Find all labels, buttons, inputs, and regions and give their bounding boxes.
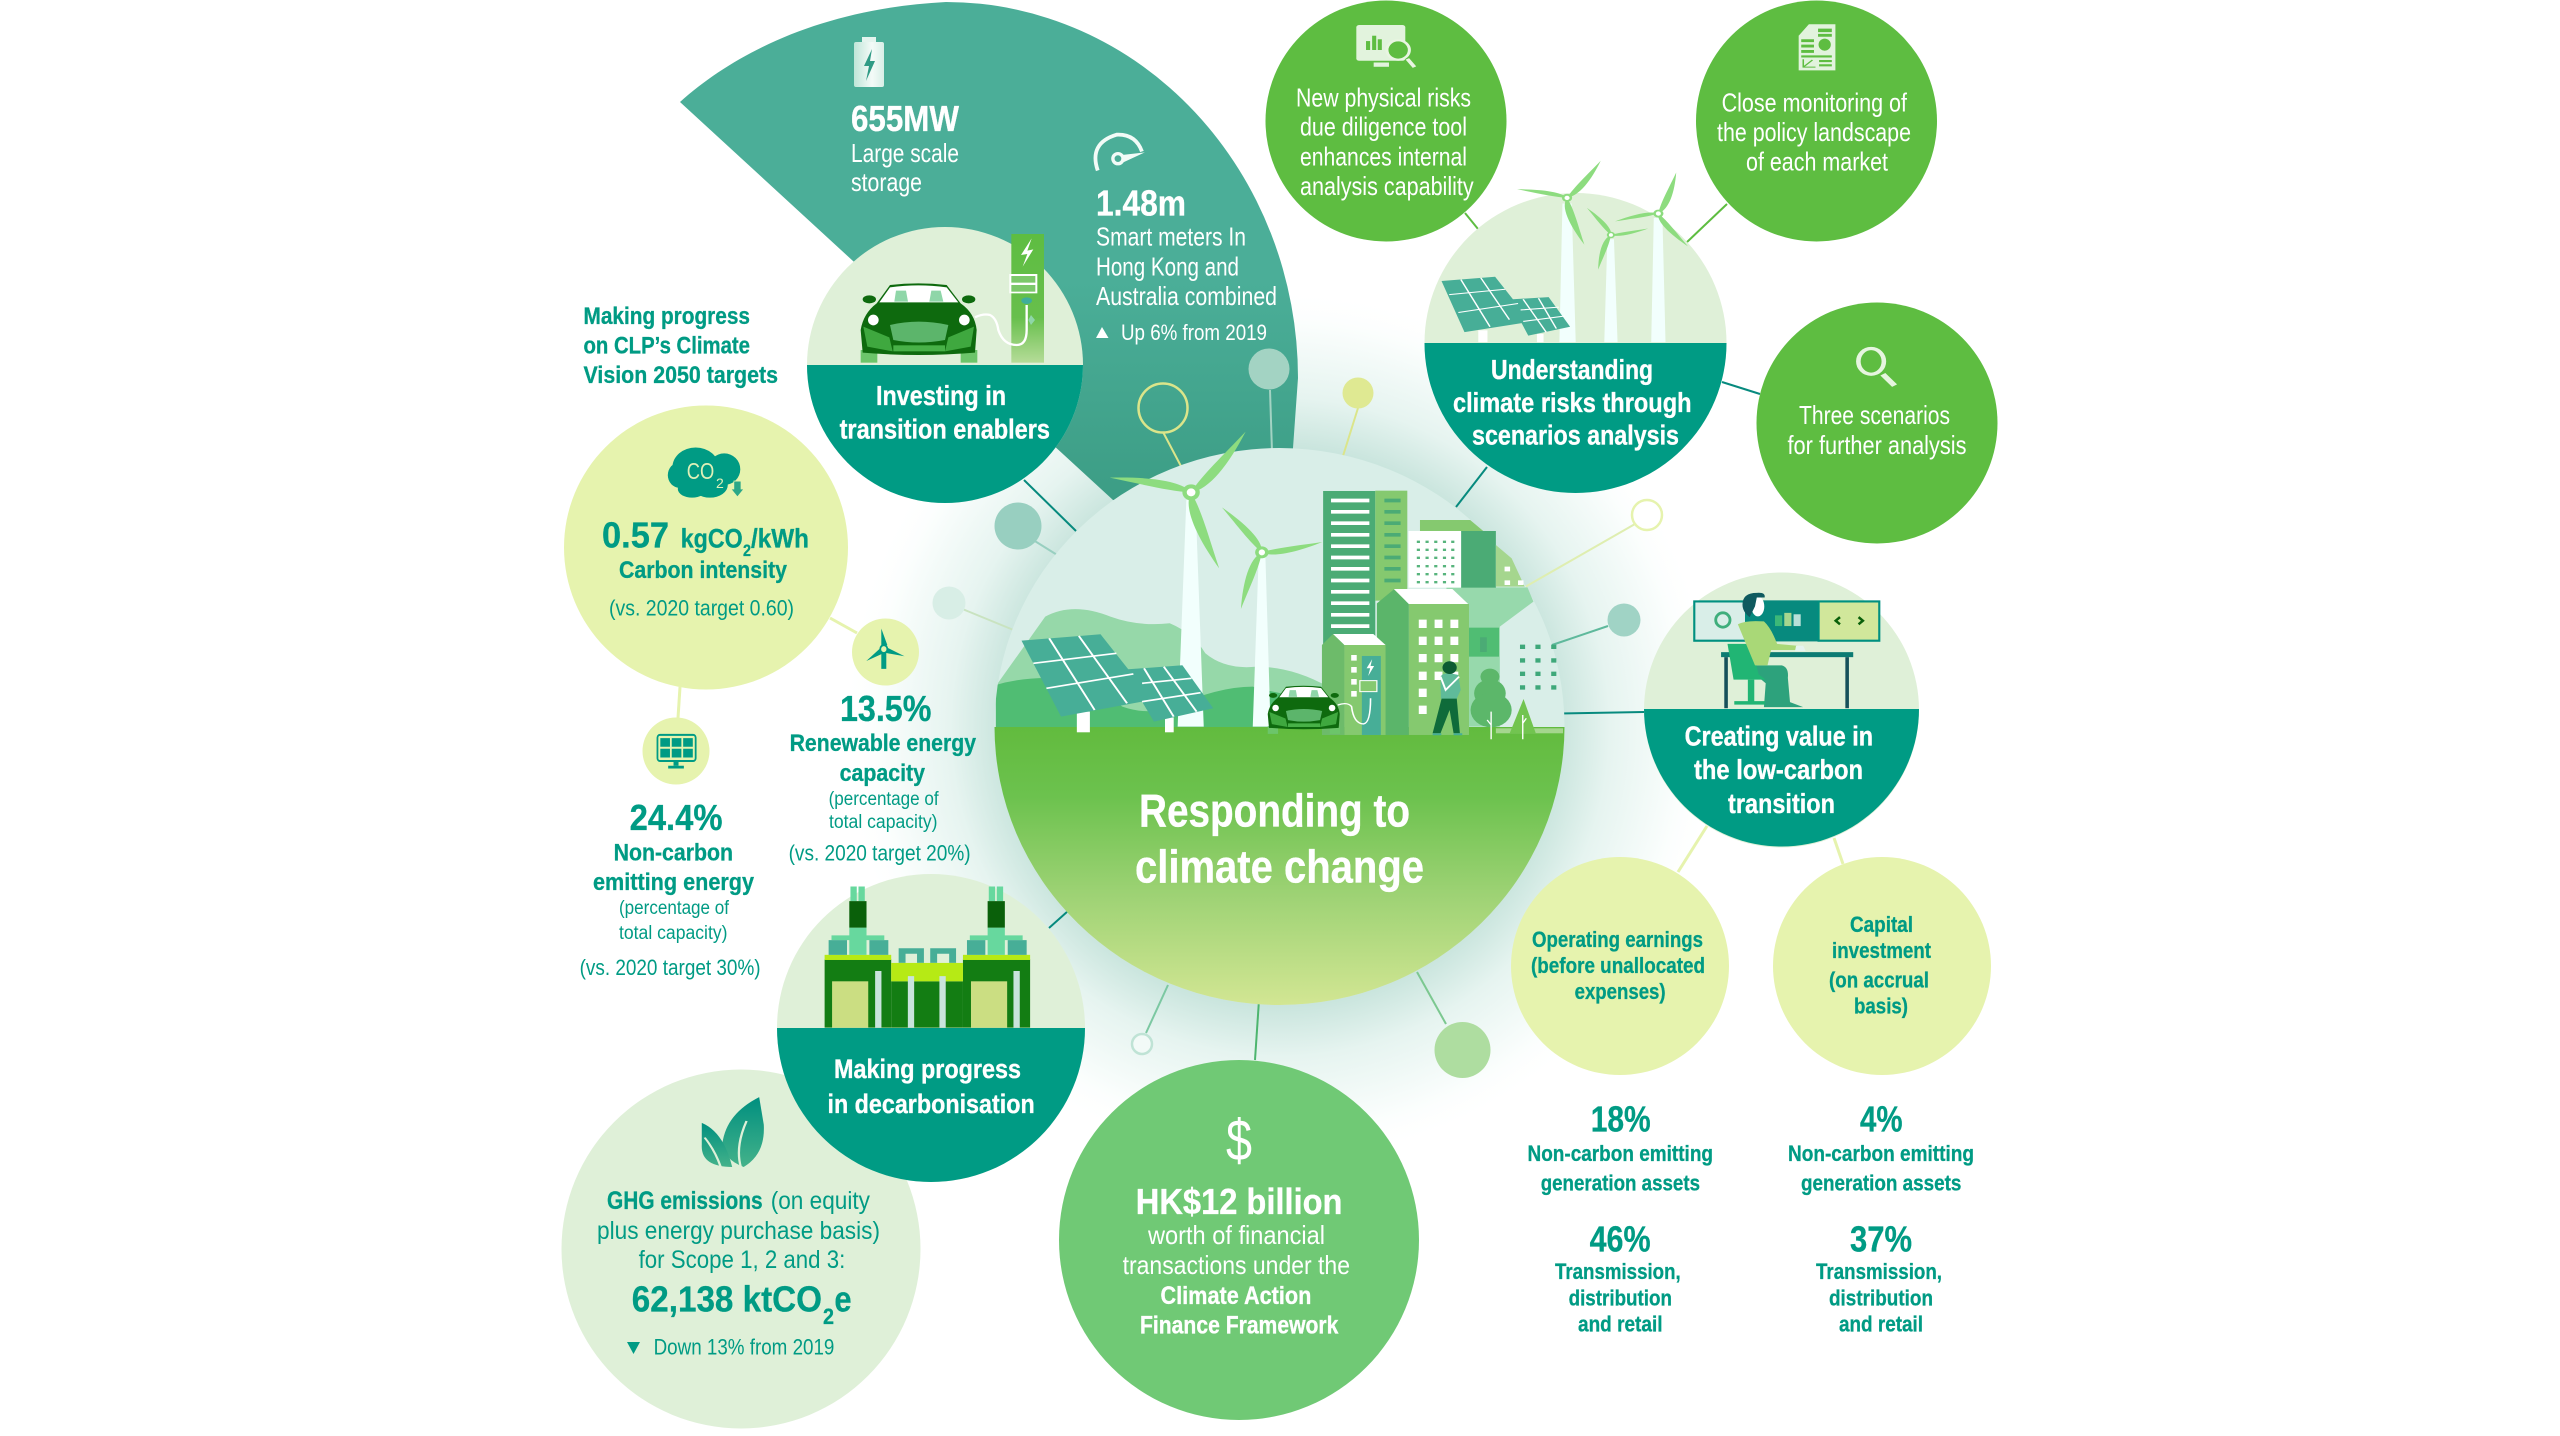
stats: operating earnings breakdown: generation assets bbox=[1541, 1171, 1700, 1196]
text: Close monitoring of bbox=[1722, 87, 1908, 117]
text: Climate Action bbox=[1160, 1282, 1311, 1310]
stats: capital investment breakdown: Transmission, bbox=[1816, 1259, 1942, 1284]
heading: Climate Vision 2050: Making progress bbox=[584, 303, 750, 330]
stat: 0.57 kgCO2/kWh bbox=[602, 514, 809, 620]
stat: 1.48m smart meters: 1.48m bbox=[1096, 183, 1186, 224]
stat: 0.57 kgCO2/kWh: 2 bbox=[743, 541, 751, 560]
text: (on accrual bbox=[1829, 968, 1929, 992]
stat: 0.57 kgCO2/kWh: kgCO bbox=[681, 524, 743, 554]
stats: capital investment breakdown: and retail bbox=[1839, 1312, 1923, 1337]
icon: CO2 cloud: 2 bbox=[716, 475, 724, 491]
stats: operating earnings breakdown: 18% bbox=[1591, 1099, 1651, 1140]
stat: 13.5% renewable energy capacity: total capacity) bbox=[829, 812, 938, 833]
stat: 655MW large scale storage bbox=[851, 98, 959, 197]
text: basis) bbox=[1854, 994, 1908, 1019]
text: Operating earnings bbox=[1532, 927, 1703, 952]
text: plus energy purchase basis) bbox=[597, 1217, 880, 1245]
stats: operating earnings breakdown: 46% bbox=[1590, 1219, 1651, 1260]
label: the low-carbon bbox=[1694, 754, 1863, 785]
label: transition enablers bbox=[840, 414, 1050, 445]
panel: central circle with city scene bbox=[990, 431, 1570, 1012]
stat: 24.4% non-carbon emitting energy: Non-carbon bbox=[614, 840, 733, 867]
panel: operating earnings bbox=[1511, 857, 1729, 1075]
stat: 655MW large scale storage: Large scale bbox=[851, 138, 959, 168]
text: the policy landscape bbox=[1717, 117, 1911, 147]
stat: 1.48m smart meters: Up 6% from 2019 bbox=[1121, 320, 1267, 345]
text bbox=[1296, 82, 1474, 201]
label: Creating value in bbox=[1685, 721, 1873, 752]
stat: 1.48m smart meters bbox=[1096, 183, 1277, 345]
connector lines between circles bbox=[678, 204, 1843, 1060]
text: enhances internal bbox=[1300, 141, 1467, 171]
icon: charging station bbox=[975, 234, 1044, 363]
label bbox=[828, 1054, 1035, 1119]
scene: solar panels bbox=[1022, 634, 1213, 732]
stat: 0.57 kgCO2/kWh: 0.57 bbox=[602, 514, 669, 556]
scene: hills clipped to circle bbox=[990, 609, 1570, 1012]
panel: GHG emissions bbox=[562, 1070, 920, 1428]
text: HK$12 billion bbox=[1136, 1181, 1342, 1222]
text: (on equity bbox=[771, 1187, 870, 1215]
label: Making progress bbox=[834, 1054, 1021, 1084]
scene: wind turbines bbox=[1109, 431, 1323, 727]
stat: 13.5% renewable energy capacity: 13.5% bbox=[840, 688, 931, 729]
text bbox=[1123, 1181, 1350, 1340]
label bbox=[1453, 354, 1692, 451]
stat: 62,138 ktCO2e: e bbox=[834, 1278, 852, 1320]
label bbox=[1685, 721, 1873, 819]
icon: CO2 cloud: CO bbox=[687, 458, 714, 484]
icon: solar panel badge bbox=[642, 718, 710, 784]
panel: understanding climate risks bbox=[1424, 160, 1726, 493]
icon: report document bbox=[1799, 24, 1835, 70]
panel: capital investment bbox=[1773, 857, 1991, 1075]
background halo around the central circle bbox=[840, 287, 1720, 1167]
stats: operating earnings breakdown: distribution bbox=[1569, 1286, 1672, 1311]
scene: city buildings bbox=[1322, 491, 1563, 735]
text: expenses) bbox=[1575, 979, 1666, 1004]
stats: capital investment breakdown: Non-carbon emitting bbox=[1788, 1141, 1974, 1166]
stat: 1.48m smart meters: Australia combined bbox=[1096, 281, 1277, 311]
text: GHG emissions bbox=[607, 1187, 763, 1215]
text: Capital bbox=[1850, 912, 1913, 937]
stat: 0.57 kgCO2/kWh: (vs. 2020 target 0.60) bbox=[609, 596, 794, 620]
panel: making progress in decarbonisation bbox=[777, 874, 1085, 1182]
stat: 1.48m smart meters: Smart meters In bbox=[1096, 222, 1246, 252]
icon: wind turbine badge bbox=[852, 618, 919, 686]
text: New physical risks bbox=[1296, 82, 1471, 112]
text bbox=[1717, 87, 1911, 177]
text: (before unallocated bbox=[1531, 953, 1705, 978]
text: Finance Framework bbox=[1140, 1312, 1338, 1340]
text: for Scope 1, 2 and 3: bbox=[639, 1246, 845, 1274]
heading: Climate Vision 2050: on CLP’s Climate bbox=[584, 333, 750, 360]
stat: 0.57 kgCO2/kWh: /kWh bbox=[751, 524, 809, 554]
stats: operating earnings breakdown bbox=[1528, 1099, 1713, 1337]
stats: operating earnings breakdown: Non-carbon emitting bbox=[1528, 1141, 1713, 1166]
panel: HK$12 billion climate finance bbox=[1059, 1060, 1419, 1420]
stat: 13.5% renewable energy capacity: (percentage of bbox=[829, 789, 939, 810]
text: analysis capability bbox=[1300, 171, 1474, 201]
stat: 655MW large scale storage: 655MW bbox=[851, 98, 959, 139]
icon: CO2 cloud bbox=[668, 447, 744, 498]
label bbox=[840, 380, 1050, 445]
panel: new physical risks tool bbox=[1266, 0, 1506, 242]
stat: 13.5% renewable energy capacity: (vs. 2020 target 20%) bbox=[789, 841, 971, 866]
icon: chart with magnifier bbox=[1356, 25, 1414, 67]
stat: 24.4% non-carbon emitting energy bbox=[580, 797, 761, 980]
text: for further analysis bbox=[1788, 430, 1966, 460]
stat: 0.57 kgCO2/kWh: Carbon intensity bbox=[619, 557, 788, 584]
label: scenarios analysis bbox=[1472, 420, 1679, 451]
stat: 655MW large scale storage: storage bbox=[851, 167, 922, 197]
icon: magnifying glass bbox=[1858, 349, 1895, 386]
main title: climate change bbox=[1135, 841, 1424, 893]
label: transition bbox=[1728, 788, 1835, 819]
panel: investing in transition enablers bbox=[807, 227, 1083, 503]
stats: capital investment breakdown: generation assets bbox=[1801, 1171, 1961, 1196]
stat: 62,138 ktCO2e bbox=[627, 1278, 852, 1360]
decorative bubbles bbox=[932, 348, 1662, 1078]
icon: electric car bbox=[861, 283, 977, 363]
stat: 13.5% renewable energy capacity: Renewable energy bbox=[790, 730, 977, 757]
stat: 13.5% renewable energy capacity bbox=[789, 688, 977, 866]
stat: 24.4% non-carbon emitting energy: 24.4% bbox=[630, 797, 722, 838]
stat: 62,138 ktCO2e: 62,138 ktCO bbox=[632, 1278, 822, 1320]
stat: 24.4% non-carbon emitting energy: (percentage of bbox=[619, 898, 730, 919]
heading: Climate Vision 2050: Vision 2050 targets bbox=[584, 362, 778, 389]
label: climate risks through bbox=[1453, 387, 1692, 418]
stat: 62,138 ktCO2e: 2 bbox=[823, 1304, 834, 1329]
stats: capital investment breakdown bbox=[1788, 1099, 1974, 1337]
icon: leaves bbox=[702, 1097, 764, 1167]
stat: 13.5% renewable energy capacity: capacity bbox=[840, 760, 926, 787]
stat: 24.4% non-carbon emitting energy: emitting energy bbox=[593, 869, 755, 896]
illustration: turbines and solar panels bbox=[1442, 160, 1689, 342]
panel: transition enablers teal sector bbox=[680, 2, 1298, 510]
stat: 24.4% non-carbon emitting energy: total capacity) bbox=[619, 923, 728, 944]
label: in decarbonisation bbox=[828, 1089, 1035, 1119]
stats: capital investment breakdown: 37% bbox=[1850, 1219, 1912, 1260]
stats: capital investment breakdown: 4% bbox=[1860, 1099, 1902, 1140]
text: due diligence tool bbox=[1300, 112, 1467, 142]
text: transactions under the bbox=[1123, 1250, 1350, 1280]
main title bbox=[1135, 785, 1424, 893]
text: worth of financial bbox=[1147, 1220, 1325, 1250]
main title: Responding to bbox=[1139, 785, 1410, 837]
stat: 1.48m smart meters: Hong Kong and bbox=[1096, 252, 1239, 282]
text: of each market bbox=[1746, 147, 1889, 177]
stats: capital investment breakdown: distribution bbox=[1829, 1286, 1933, 1311]
scene: person walking bbox=[1433, 661, 1462, 735]
icon: electric car in city scene bbox=[1268, 686, 1340, 734]
text: investment bbox=[1832, 938, 1931, 963]
text: Three scenarios bbox=[1799, 400, 1950, 430]
stats: operating earnings breakdown: and retail bbox=[1578, 1312, 1662, 1337]
heading: Climate Vision 2050 bbox=[584, 303, 778, 389]
panel: creating value in low-carbon transition bbox=[1644, 572, 1919, 848]
scene: trees bbox=[1471, 669, 1536, 739]
stats: operating earnings breakdown: Transmission, bbox=[1555, 1259, 1681, 1284]
text bbox=[1788, 400, 1966, 460]
icon: dollar sign: $ bbox=[1226, 1108, 1252, 1173]
panel: close monitoring of policy bbox=[1696, 0, 1937, 242]
text bbox=[1829, 912, 1931, 1019]
text bbox=[1531, 927, 1705, 1004]
panel: carbon intensity bbox=[564, 406, 848, 690]
text bbox=[597, 1187, 880, 1274]
stat: 62,138 ktCO2e: Down 13% from 2019 bbox=[654, 1334, 834, 1360]
icon: battery bbox=[854, 37, 884, 87]
label: Understanding bbox=[1491, 354, 1653, 385]
label: Investing in bbox=[876, 380, 1006, 411]
illustration: power plant bbox=[825, 886, 1030, 1028]
illustration: person at desk with monitors bbox=[1694, 593, 1879, 708]
stat: 24.4% non-carbon emitting energy: (vs. 2020 target 30%) bbox=[580, 955, 761, 980]
panel: three scenarios bbox=[1756, 302, 1998, 544]
icon: smart meter gauge bbox=[1095, 135, 1145, 170]
